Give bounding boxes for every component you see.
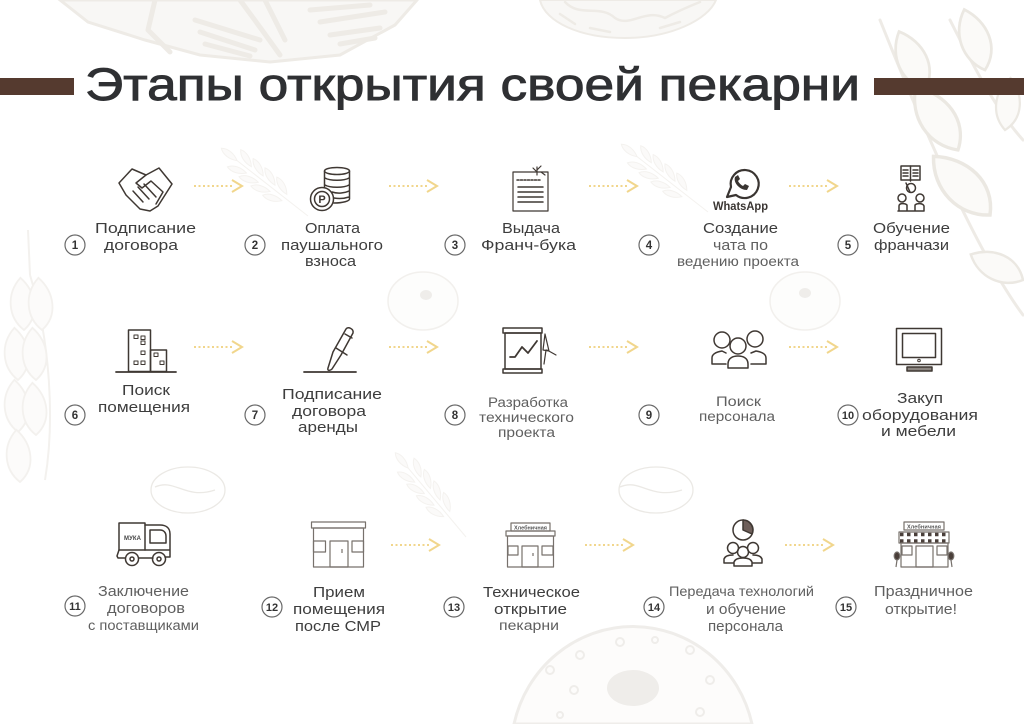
number 15: 15 bbox=[840, 602, 852, 614]
label 4: ведению проекта bbox=[677, 254, 800, 269]
background: bread loaves bbox=[151, 467, 693, 513]
icon: monitor bbox=[896, 328, 942, 371]
icon: whatsapp bbox=[713, 170, 768, 213]
arrow 4-5 bbox=[789, 180, 837, 192]
label 1: договора bbox=[104, 237, 179, 254]
label 15: открытие! bbox=[885, 602, 957, 618]
label 9: персонала bbox=[699, 409, 776, 424]
number 11: 11 bbox=[69, 601, 81, 613]
label 11 bbox=[88, 584, 199, 633]
arrow 12-13 bbox=[391, 539, 439, 551]
number 2: 2 bbox=[252, 240, 258, 252]
icon: store with sign: Хлебничная bbox=[514, 524, 547, 532]
label 4: Создание bbox=[703, 220, 778, 237]
icon: franchise book document bbox=[513, 166, 548, 211]
label 7 bbox=[282, 386, 382, 436]
number 10: 10 bbox=[842, 410, 854, 422]
number 14: 14 bbox=[648, 602, 661, 614]
label 10: Закуп bbox=[897, 390, 943, 407]
step 8 bbox=[445, 328, 574, 440]
number 4 bbox=[639, 235, 659, 255]
icon: empty store bbox=[312, 522, 366, 567]
step 11 bbox=[65, 523, 199, 633]
background: donut sketch top centre bbox=[540, 0, 716, 38]
step 6 bbox=[65, 330, 190, 425]
label 2: Оплата bbox=[305, 220, 361, 237]
label 5: Обучение bbox=[873, 220, 950, 237]
label 10: оборудования bbox=[862, 407, 978, 424]
background: large donut bottom bbox=[514, 627, 752, 724]
arrow 2-3 bbox=[389, 180, 437, 192]
icon: people with pie chart bbox=[724, 520, 762, 566]
label 4: чата по bbox=[713, 238, 768, 254]
label 3: Франч-бука bbox=[481, 237, 577, 254]
label 13: открытие bbox=[494, 601, 567, 618]
step 15 bbox=[836, 522, 973, 618]
label 12: помещения bbox=[293, 601, 385, 618]
label 13: пекарни bbox=[499, 618, 559, 633]
label 11: с поставщиками bbox=[88, 618, 199, 633]
icon: pen signing bbox=[304, 328, 356, 372]
arrow 9-10 bbox=[789, 341, 837, 353]
background: croissant sketch top left bbox=[60, 0, 417, 62]
label 6: Поиск bbox=[122, 382, 170, 399]
arrow 6-7 bbox=[194, 341, 242, 353]
number 7: 7 bbox=[252, 410, 258, 422]
title: Этапы открытия своей пекарни bbox=[85, 59, 860, 110]
number 3: 3 bbox=[452, 240, 458, 252]
step 13 bbox=[444, 523, 580, 633]
label 2: паушального bbox=[281, 237, 383, 254]
background: wheat ear right bbox=[880, 5, 1024, 315]
number 6: 6 bbox=[72, 410, 78, 422]
icon: training group with book bbox=[898, 166, 924, 211]
number 8: 8 bbox=[452, 410, 459, 422]
number 5: 5 bbox=[845, 240, 852, 252]
label 10 bbox=[862, 390, 978, 440]
label 1: Подписание bbox=[95, 220, 196, 237]
label 14: персонала bbox=[708, 619, 784, 635]
decorative bar right bbox=[874, 78, 1024, 95]
label 11: договоров bbox=[107, 601, 185, 617]
label 3 bbox=[481, 220, 577, 254]
number 4: 4 bbox=[646, 240, 653, 252]
arrow 3-4 bbox=[589, 180, 637, 192]
step 5 bbox=[838, 166, 950, 255]
decorative bar left bbox=[0, 78, 74, 95]
label 13 bbox=[483, 584, 580, 633]
label 14: Передача технологий bbox=[669, 584, 814, 599]
label 6 bbox=[98, 382, 190, 416]
icon: festive store with balloons: Хлебничная bbox=[907, 524, 941, 530]
label 12: после СМР bbox=[295, 618, 381, 635]
step 7 bbox=[245, 328, 382, 436]
number 13: 13 bbox=[448, 602, 460, 614]
label 7: договора bbox=[292, 403, 367, 420]
number 14 bbox=[644, 597, 664, 617]
number 1: 1 bbox=[72, 240, 79, 252]
icon: whatsapp: WhatsApp bbox=[713, 201, 768, 213]
label 3: Выдача bbox=[502, 220, 561, 237]
icon: presentation board with chart bbox=[503, 328, 556, 373]
label 14: и обучение bbox=[706, 602, 786, 618]
step 9 bbox=[639, 331, 776, 425]
arrow 13-14 bbox=[585, 539, 633, 551]
label 15: Праздничное bbox=[874, 584, 973, 600]
arrow 1-2 bbox=[194, 180, 242, 192]
label 10: и мебели bbox=[881, 423, 956, 440]
step 12 bbox=[262, 522, 385, 635]
label 9 bbox=[699, 394, 776, 424]
step 2 bbox=[245, 168, 383, 270]
arrow 7-8 bbox=[389, 341, 437, 353]
label 2: взноса bbox=[305, 253, 357, 270]
step 1 bbox=[65, 168, 196, 255]
arrow 8-9 bbox=[589, 341, 637, 353]
label 11: Заключение bbox=[98, 584, 189, 600]
step 4 bbox=[639, 170, 800, 269]
label 8: Разработка bbox=[488, 395, 569, 410]
icon: handshake bbox=[119, 168, 172, 211]
arrow 14-15 bbox=[785, 539, 833, 551]
label 15 bbox=[874, 584, 973, 618]
label 8: проекта bbox=[498, 425, 556, 440]
number 12: 12 bbox=[266, 602, 278, 614]
step 10 bbox=[838, 328, 978, 440]
background: faint wheat ears bbox=[213, 133, 717, 546]
label 4 bbox=[677, 220, 800, 269]
label 6: помещения bbox=[98, 399, 190, 416]
background: small donuts bbox=[388, 272, 840, 330]
step 14 bbox=[644, 520, 814, 635]
label 14 bbox=[669, 584, 814, 635]
background: wheat ear left bbox=[5, 230, 52, 482]
label 5: франчази bbox=[874, 237, 949, 254]
label 7: аренды bbox=[298, 419, 358, 436]
label 2 bbox=[281, 220, 383, 270]
label 12: Прием bbox=[313, 584, 365, 601]
label 8 bbox=[479, 395, 574, 440]
number 9: 9 bbox=[646, 410, 652, 422]
icon: truck: МУКА bbox=[124, 536, 142, 542]
step 3 bbox=[445, 166, 577, 255]
label 8: технического bbox=[479, 410, 574, 425]
label 13: Техническое bbox=[483, 584, 580, 601]
icon: group of people bbox=[712, 331, 766, 368]
icon: coins: Р bbox=[318, 194, 326, 206]
icon: buildings bbox=[116, 330, 176, 372]
label 9: Поиск bbox=[716, 394, 761, 409]
label 7: Подписание bbox=[282, 386, 382, 403]
label 12 bbox=[293, 584, 385, 635]
label 5 bbox=[873, 220, 950, 254]
label 1 bbox=[95, 220, 196, 254]
